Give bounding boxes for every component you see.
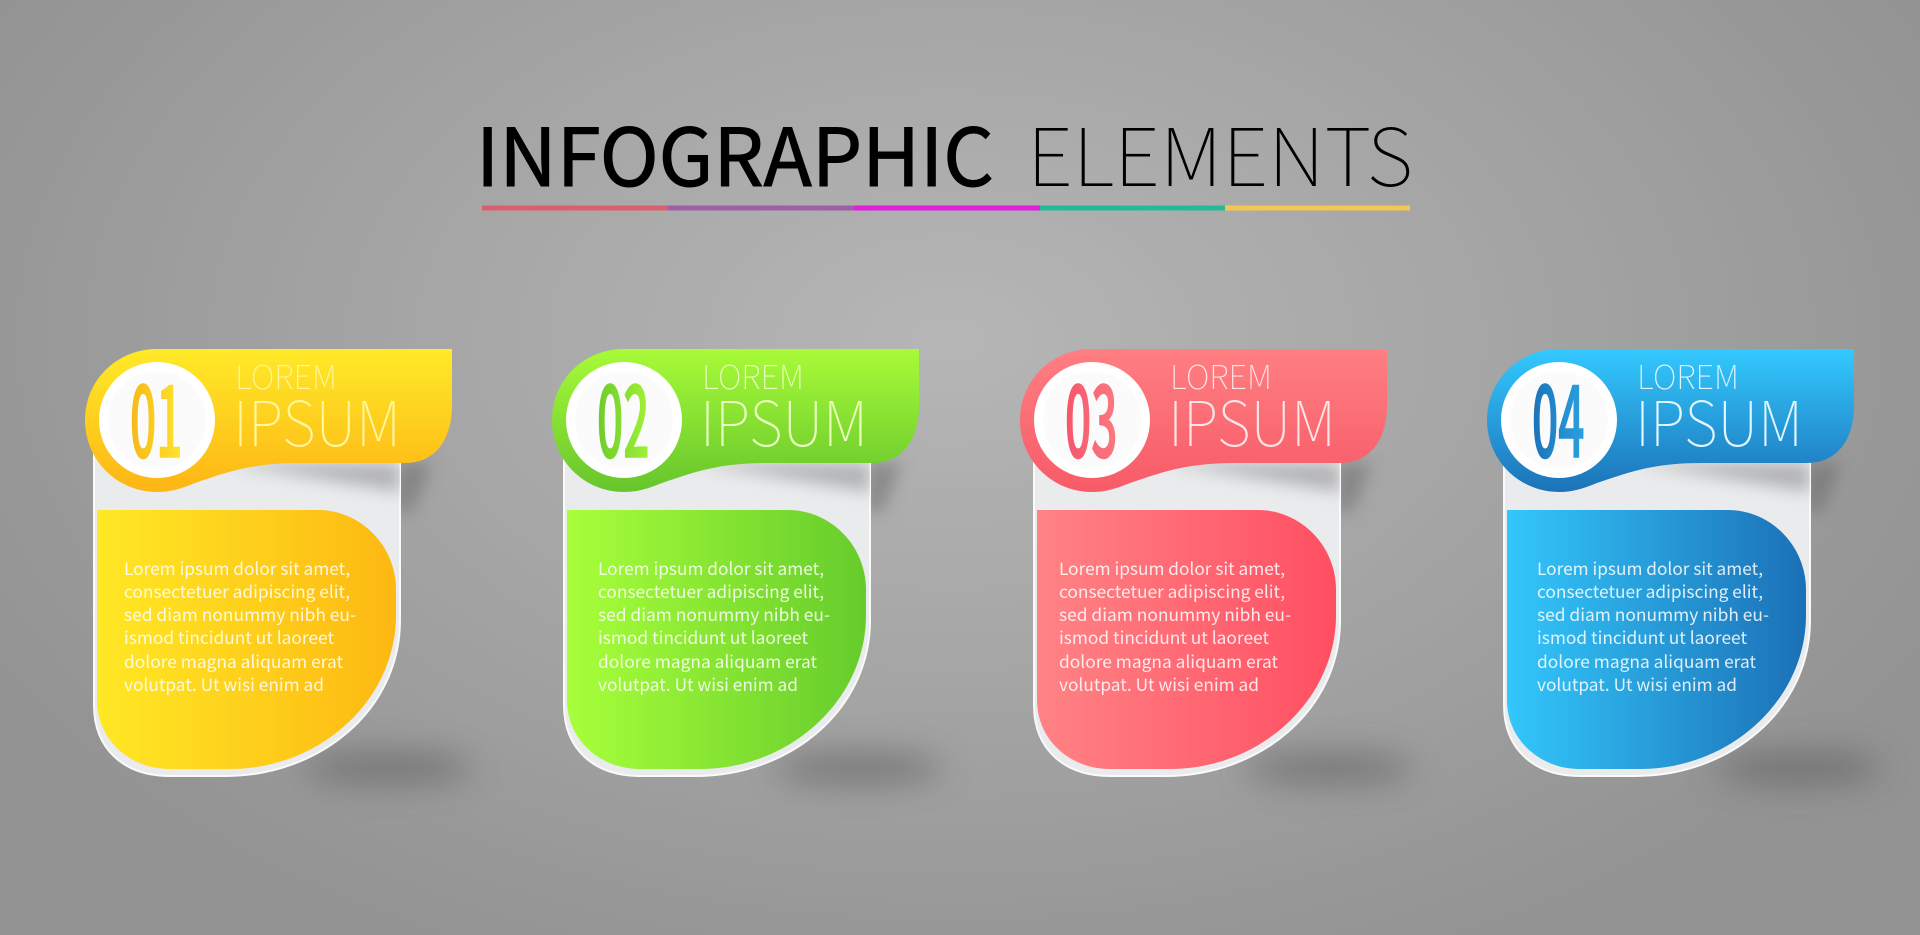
paper 2 (564, 440, 943, 785)
body text 3: dolore magna aliquam erat (1059, 648, 1279, 673)
body text 4: volutpat. Ut wisi enim ad (1537, 671, 1737, 696)
ribbon heading 1: LOREM (235, 351, 337, 399)
body text 3: ismod tincidunt ut laoreet (1059, 624, 1270, 649)
body text 2: sed diam nonummy nibh eu- (598, 601, 830, 626)
colour panel 3 (1037, 510, 1336, 769)
body text 2: consectetuer adipiscing elit, (598, 578, 824, 603)
body text 2: Lorem ipsum dolor sit amet, (598, 555, 824, 580)
paper 1 (94, 440, 473, 785)
title underline (482, 206, 1410, 210)
body text 1 (124, 555, 356, 696)
ribbon heading 1: IPSUM (233, 374, 401, 464)
body text 3 (1059, 555, 1291, 696)
body text 4: consectetuer adipiscing elit, (1537, 578, 1763, 603)
number badge 2 (566, 343, 682, 487)
ribbon 1 (85, 349, 452, 492)
colour panel 1 (97, 510, 396, 769)
card 2: green (552, 343, 943, 785)
card 3: red (1020, 343, 1413, 785)
body text 1: sed diam nonummy nibh eu- (124, 601, 356, 626)
ribbon heading 4: IPSUM (1635, 374, 1803, 464)
paper 3 (1034, 440, 1413, 785)
number badge 3 (1034, 343, 1150, 487)
ribbon 2 (552, 349, 919, 492)
ribbon heading 3: LOREM (1170, 351, 1272, 399)
paper 4 (1504, 440, 1883, 785)
body text 1: Lorem ipsum dolor sit amet, (124, 555, 350, 580)
card 4: blue (1487, 343, 1883, 785)
body text 4: dolore magna aliquam erat (1537, 648, 1757, 673)
title: elements: ELEMENTS (1027, 94, 1413, 210)
body text 3: volutpat. Ut wisi enim ad (1059, 671, 1259, 696)
ribbon heading 2: LOREM (702, 351, 804, 399)
body text 3: Lorem ipsum dolor sit amet, (1059, 555, 1285, 580)
card 1: yellow (85, 343, 473, 785)
body text 3: consectetuer adipiscing elit, (1059, 578, 1285, 603)
number badge 1: 01 (130, 343, 182, 487)
body text 1: consectetuer adipiscing elit, (124, 578, 350, 603)
body text 1: volutpat. Ut wisi enim ad (124, 671, 324, 696)
body text 2 (598, 555, 830, 696)
body text 2: dolore magna aliquam erat (598, 648, 818, 673)
ribbon 3 (1020, 349, 1387, 492)
body text 1: dolore magna aliquam erat (124, 648, 344, 673)
body text 3: sed diam nonummy nibh eu- (1059, 601, 1291, 626)
title: infographic: INFOGRAPHIC (476, 94, 994, 210)
number badge 3: 03 (1065, 343, 1117, 487)
body text 2: volutpat. Ut wisi enim ad (598, 671, 798, 696)
body text 4 (1537, 555, 1769, 696)
number badge 4: 04 (1532, 343, 1584, 487)
ribbon 4 (1487, 349, 1854, 492)
body text 2: ismod tincidunt ut laoreet (598, 624, 809, 649)
colour panel 4 (1507, 510, 1806, 769)
body text 4: ismod tincidunt ut laoreet (1537, 624, 1748, 649)
colour panel 2 (567, 510, 866, 769)
body text 4: sed diam nonummy nibh eu- (1537, 601, 1769, 626)
body text 4: Lorem ipsum dolor sit amet, (1537, 555, 1763, 580)
title (476, 94, 1413, 210)
number badge 4 (1501, 343, 1617, 487)
ribbon heading 2: IPSUM (700, 374, 868, 464)
body text 1: ismod tincidunt ut laoreet (124, 624, 335, 649)
number badge 2: 02 (597, 343, 649, 487)
number badge 1 (99, 343, 215, 487)
ribbon heading 3: IPSUM (1168, 374, 1336, 464)
ribbon heading 4: LOREM (1637, 351, 1739, 399)
